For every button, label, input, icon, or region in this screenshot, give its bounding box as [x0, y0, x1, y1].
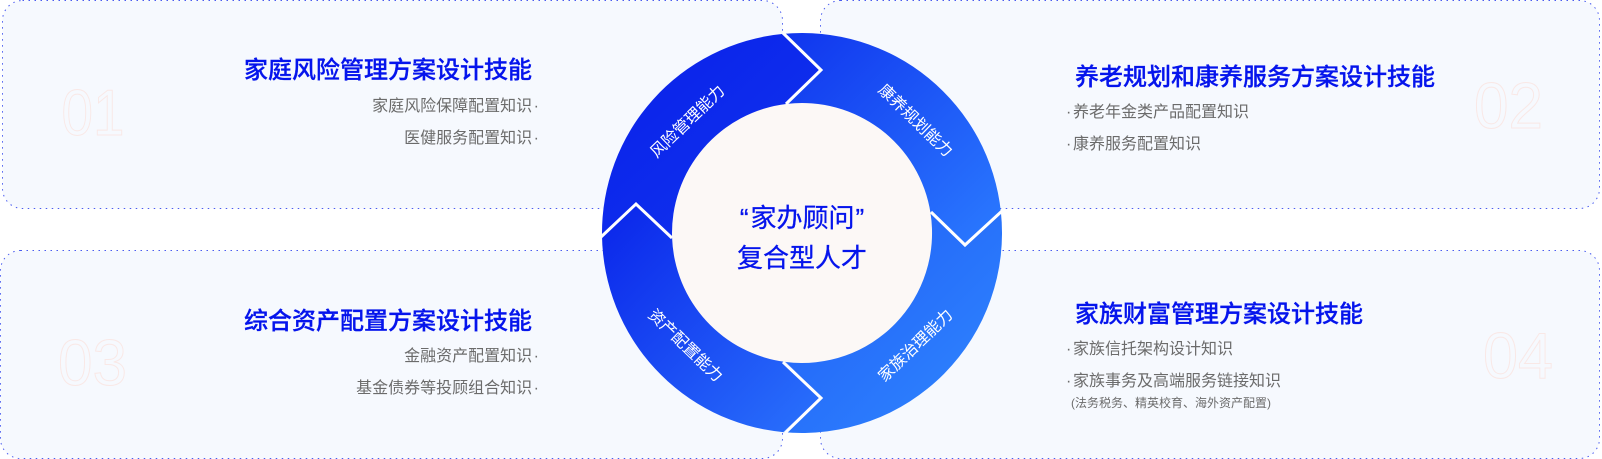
item: 家庭风险保障配置知识·	[372, 98, 539, 115]
item: ·养老年金类产品配置知识	[1066, 104, 1249, 121]
arrow: left chevron	[601, 204, 672, 238]
inner circle	[671, 102, 933, 364]
center title: “家办顾问”	[740, 203, 864, 233]
item: ·康养服务配置知识	[1066, 136, 1201, 153]
arrow: right chevron	[931, 211, 1002, 245]
arrow: bottom chevron	[783, 362, 821, 433]
item: 金融资产配置知识·	[404, 348, 539, 365]
panel: 04 family wealth	[820, 250, 1600, 459]
item: 医健服务配置知识·	[404, 130, 539, 147]
heading: 家族财富管理方案设计技能	[1075, 301, 1363, 328]
label: 家族治理能力	[875, 306, 956, 385]
item: 基金债券等投顾组合知识·	[356, 380, 539, 397]
heading: 家庭风险管理方案设计技能	[244, 57, 532, 84]
number 02: 02	[1474, 69, 1543, 142]
segment: asset allocation	[602, 204, 821, 432]
label: 康养规划能力	[875, 81, 956, 160]
number 03: 03	[58, 326, 127, 399]
label: 风险管理能力	[647, 82, 728, 161]
heading: 养老规划和康养服务方案设计技能	[1075, 64, 1435, 91]
arrow: top chevron	[783, 33, 821, 104]
item: ·家族信托架构设计知识	[1066, 341, 1233, 358]
center title	[737, 203, 867, 273]
heading: 综合资产配置方案设计技能	[244, 308, 532, 335]
number 04: 04	[1483, 319, 1553, 392]
label: 资产配置能力	[645, 306, 726, 385]
panel: 02 retirement planning	[820, 0, 1600, 209]
item: ·家族事务及高端服务链接知识	[1066, 373, 1281, 390]
panel: 03 asset allocation	[0, 250, 783, 459]
segment: elder care planning	[783, 33, 1001, 245]
segment: family governance	[783, 212, 1002, 433]
panel: 01 family risk management	[2, 0, 783, 209]
center title: 复合型人才	[737, 243, 867, 273]
segment: risk management	[602, 34, 821, 238]
number 01: 01	[62, 76, 124, 149]
note: (法务税务、精英校育、海外资产配置)	[1071, 396, 1271, 410]
